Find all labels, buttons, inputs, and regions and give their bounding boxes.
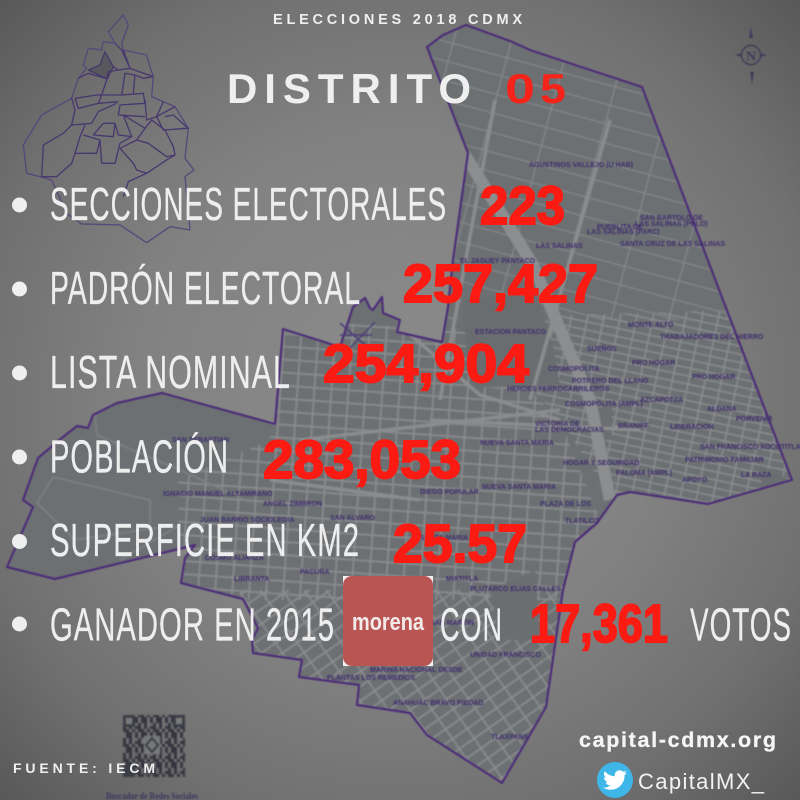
street labels: SAN SEBASTIAN bbox=[172, 437, 229, 444]
street labels: HEROES FERROCARRILEROS bbox=[507, 386, 610, 393]
street labels: SAN FRANCISCO XOCOTITLA bbox=[700, 444, 800, 451]
inset map of CDMX districts bbox=[23, 15, 194, 243]
title: distrito 05: 5 bbox=[540, 65, 566, 112]
street labels: PACURA bbox=[300, 569, 329, 576]
street labels: LIBRANTA bbox=[234, 576, 269, 583]
inset district lines bbox=[42, 43, 188, 197]
street labels bbox=[163, 162, 800, 741]
stat: superficie: SUPERFICIE EN KM2 bbox=[50, 514, 360, 566]
street labels: COSMOPOLITA bbox=[548, 366, 600, 373]
icon: compass north arrow bbox=[735, 27, 767, 84]
street labels: ESTACION PANTACO bbox=[475, 329, 547, 336]
street labels: TLATILCO bbox=[565, 518, 600, 525]
street labels: PLUTARCO ELIAS CALLES bbox=[470, 586, 561, 593]
stat: secciones electorales: 223 bbox=[480, 176, 565, 236]
stat: superficie: 25.57 bbox=[393, 514, 527, 574]
street labels: LIBERACION bbox=[670, 424, 714, 431]
street labels: EL JAGUEY PANTACO bbox=[460, 258, 535, 265]
icon: compass north arrow: N bbox=[746, 50, 756, 64]
icon: morena logo bbox=[343, 576, 433, 666]
street labels: MARINA NACIONAL DESDE bbox=[370, 667, 463, 674]
street labels: APOYO bbox=[682, 477, 708, 484]
street labels: ALDANA bbox=[707, 406, 737, 413]
street labels: LAS DEMOCRACIAS bbox=[535, 427, 604, 434]
street labels: HOGAR Y SEGURIDAD bbox=[563, 460, 639, 467]
street labels: PLANTAS LOS REMEDIOS bbox=[327, 675, 415, 682]
inset outer outline bbox=[23, 15, 194, 243]
street labels: BRANIFF bbox=[618, 423, 649, 430]
stat: secciones electorales bbox=[12, 176, 565, 236]
source note: FUENTE: IECM bbox=[13, 760, 155, 776]
stat: poblacion: 283,053 bbox=[263, 430, 461, 490]
street labels: PATRIMONIO FAMILIAR bbox=[685, 457, 764, 464]
street labels: PORVENIR bbox=[736, 416, 772, 423]
stat: lista nominal: LISTA NOMINAL bbox=[50, 346, 291, 398]
street labels: JUAN BARRIO SOCIOLEGIA bbox=[200, 517, 295, 524]
highlighted district 05 bbox=[88, 52, 113, 79]
street labels: COSMO ALIANZA bbox=[205, 555, 264, 562]
header: elecciones 2018 cdmx: ELECCIONES 2018 CDMX bbox=[273, 12, 522, 28]
street labels: NUEVA SANTA MARIA bbox=[480, 440, 554, 447]
stat: padron electoral: 257,427 bbox=[403, 254, 598, 314]
street labels: PRO HOGAR bbox=[692, 374, 735, 381]
street labels: SAN MARTIN bbox=[430, 620, 474, 627]
street labels: SUEÑOS bbox=[587, 344, 617, 353]
street labels: DIEGO POPULAR bbox=[420, 489, 479, 496]
street labels: PUEBLITA DE bbox=[597, 224, 643, 231]
street labels: IGNACIO MANUEL ALTAMIRANO bbox=[163, 491, 273, 498]
stat: lista nominal: 254,904 bbox=[323, 334, 529, 394]
street labels: LAS SALINAS bbox=[536, 243, 583, 250]
street labels: PRO HOGAR bbox=[632, 360, 675, 367]
street labels: MIXTITLA bbox=[446, 576, 478, 583]
street labels: AGUSTINOS VALLEJO (U HAB) bbox=[529, 162, 633, 169]
stat: ganador en 2015: CON bbox=[440, 598, 503, 650]
icon: morena logo: morena bbox=[352, 609, 425, 636]
street labels: MONTE ALTO bbox=[628, 322, 674, 329]
street labels: ANAHUAC BRAVO PIEDAD bbox=[393, 700, 483, 707]
street labels: SAN ALVARO bbox=[330, 515, 376, 522]
street labels: PLAZA DE LOS bbox=[540, 501, 591, 508]
stat: poblacion bbox=[12, 430, 461, 490]
stat: ganador en 2015: GANADOR EN 2015 bbox=[50, 598, 335, 650]
street labels: SANTA MARIA bbox=[420, 535, 468, 542]
street labels: LA RAZA bbox=[741, 472, 771, 479]
street labels: LAS SALINAS (PARC) bbox=[587, 229, 660, 236]
street labels: ANAHUAC bbox=[371, 615, 406, 622]
street labels: AZCAPOTZA bbox=[640, 397, 683, 404]
stat: lista nominal bbox=[12, 334, 529, 398]
street labels: TLAXPANA bbox=[491, 734, 529, 741]
street labels: COSMOPOLITA (AMPL) bbox=[565, 401, 643, 408]
street labels: ANGEL ZIMBRON bbox=[263, 501, 322, 508]
icon: twitter bird bbox=[597, 762, 633, 798]
stat: secciones electorales: SECCIONES ELECTORALES bbox=[50, 178, 447, 230]
stat: poblacion: POBLACIÓN bbox=[50, 430, 229, 482]
stat: ganador en 2015: 17,361 bbox=[530, 594, 668, 654]
street labels: PALOMA (AMPL) bbox=[616, 470, 672, 477]
street labels: SAN BARTOLO DE bbox=[640, 215, 703, 222]
QR code bbox=[123, 715, 185, 777]
stat: padron electoral: PADRÓN ELECTORAL bbox=[50, 262, 361, 314]
street labels: VICTORIA DE bbox=[535, 421, 580, 428]
twitter handle: CapitalMX_ bbox=[638, 769, 765, 794]
street labels: LAS SALINAS (PBLO) bbox=[635, 221, 708, 228]
title: distrito 05: 0 bbox=[505, 65, 535, 112]
stat: ganador en 2015 bbox=[12, 576, 792, 666]
street labels: TRABAJADORES DEL HIERRO bbox=[660, 334, 764, 341]
twitter handle bbox=[597, 762, 765, 798]
title: distrito 05: DISTRITO bbox=[227, 65, 471, 112]
website: capital-cdmx.org bbox=[579, 728, 776, 752]
street labels: UNIDAD FRANCISCO bbox=[470, 652, 541, 659]
street labels: POTRERO DEL LLANO bbox=[572, 378, 649, 385]
street labels: NUEVA SANTA MARIA bbox=[482, 484, 556, 491]
small star boundary bbox=[340, 322, 375, 348]
street labels: SANTA CRUZ DE LAS SALINAS bbox=[620, 241, 725, 248]
